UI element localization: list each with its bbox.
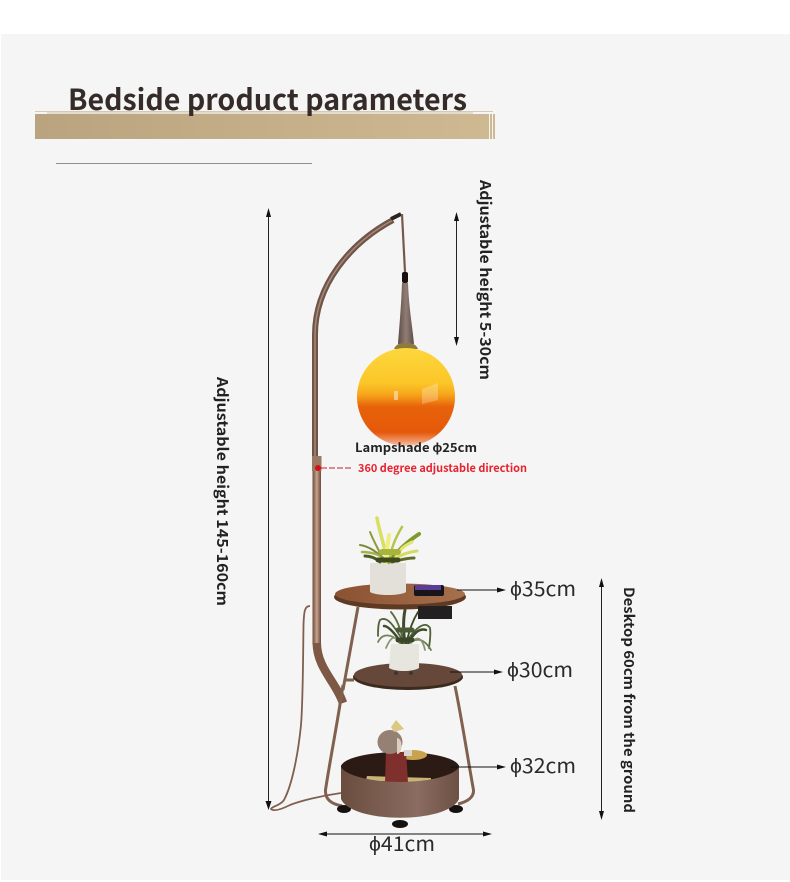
callout: rotation: 360 degree adjustable direction (358, 460, 527, 476)
title: Bedside product parameters (68, 77, 467, 119)
dimension: upper table: ϕ35cm (510, 573, 576, 602)
dimension: upper table (457, 573, 576, 602)
power cord (271, 606, 341, 810)
arm tip (391, 214, 401, 219)
upper plant (360, 518, 419, 562)
label: overall adjustable height: Adjustable height 145-160cm (212, 376, 233, 606)
ribbed pot (389, 644, 419, 671)
figurine (378, 720, 427, 782)
label: desktop height: Desktop 60cm from the ground (619, 587, 639, 813)
table legs (325, 607, 474, 806)
label: lampshade: Lampshade ϕ25cm (355, 437, 477, 456)
brass collar (394, 343, 418, 349)
dimension: base width (318, 828, 492, 857)
dimension: basket (450, 750, 576, 779)
wireless charger with phone (414, 585, 444, 596)
white pot (370, 563, 406, 595)
lower plant (378, 610, 431, 650)
glass globe (357, 348, 455, 446)
heading band (35, 111, 495, 139)
overall height arrow (266, 208, 272, 810)
dimension: basket: ϕ32cm (510, 750, 576, 779)
basket feet (337, 805, 351, 813)
socket box (418, 606, 452, 619)
basket wall (341, 765, 459, 818)
upper tabletop (334, 584, 466, 610)
hanging cord (402, 214, 405, 272)
metal cone (398, 283, 414, 344)
cord cap (402, 272, 408, 283)
floor lamp (312, 214, 455, 703)
globe highlights (394, 391, 398, 400)
pole collar (312, 456, 322, 471)
side table (271, 518, 474, 828)
storage basket (337, 720, 463, 828)
dimension: lower table (450, 654, 573, 683)
lamp pole (315, 220, 393, 460)
basket front wall (341, 767, 459, 791)
title underline (56, 163, 312, 164)
label: shade adjustable height: Adjustable height 5-30cm (475, 179, 496, 380)
books (366, 776, 431, 782)
desktop height arrow (599, 578, 604, 820)
basket interior (341, 752, 459, 782)
shade height arrow (454, 212, 459, 346)
dimension: base width: ϕ41cm (369, 828, 435, 857)
dimension: lower table: ϕ30cm (507, 654, 573, 683)
lower tabletop (353, 664, 463, 690)
